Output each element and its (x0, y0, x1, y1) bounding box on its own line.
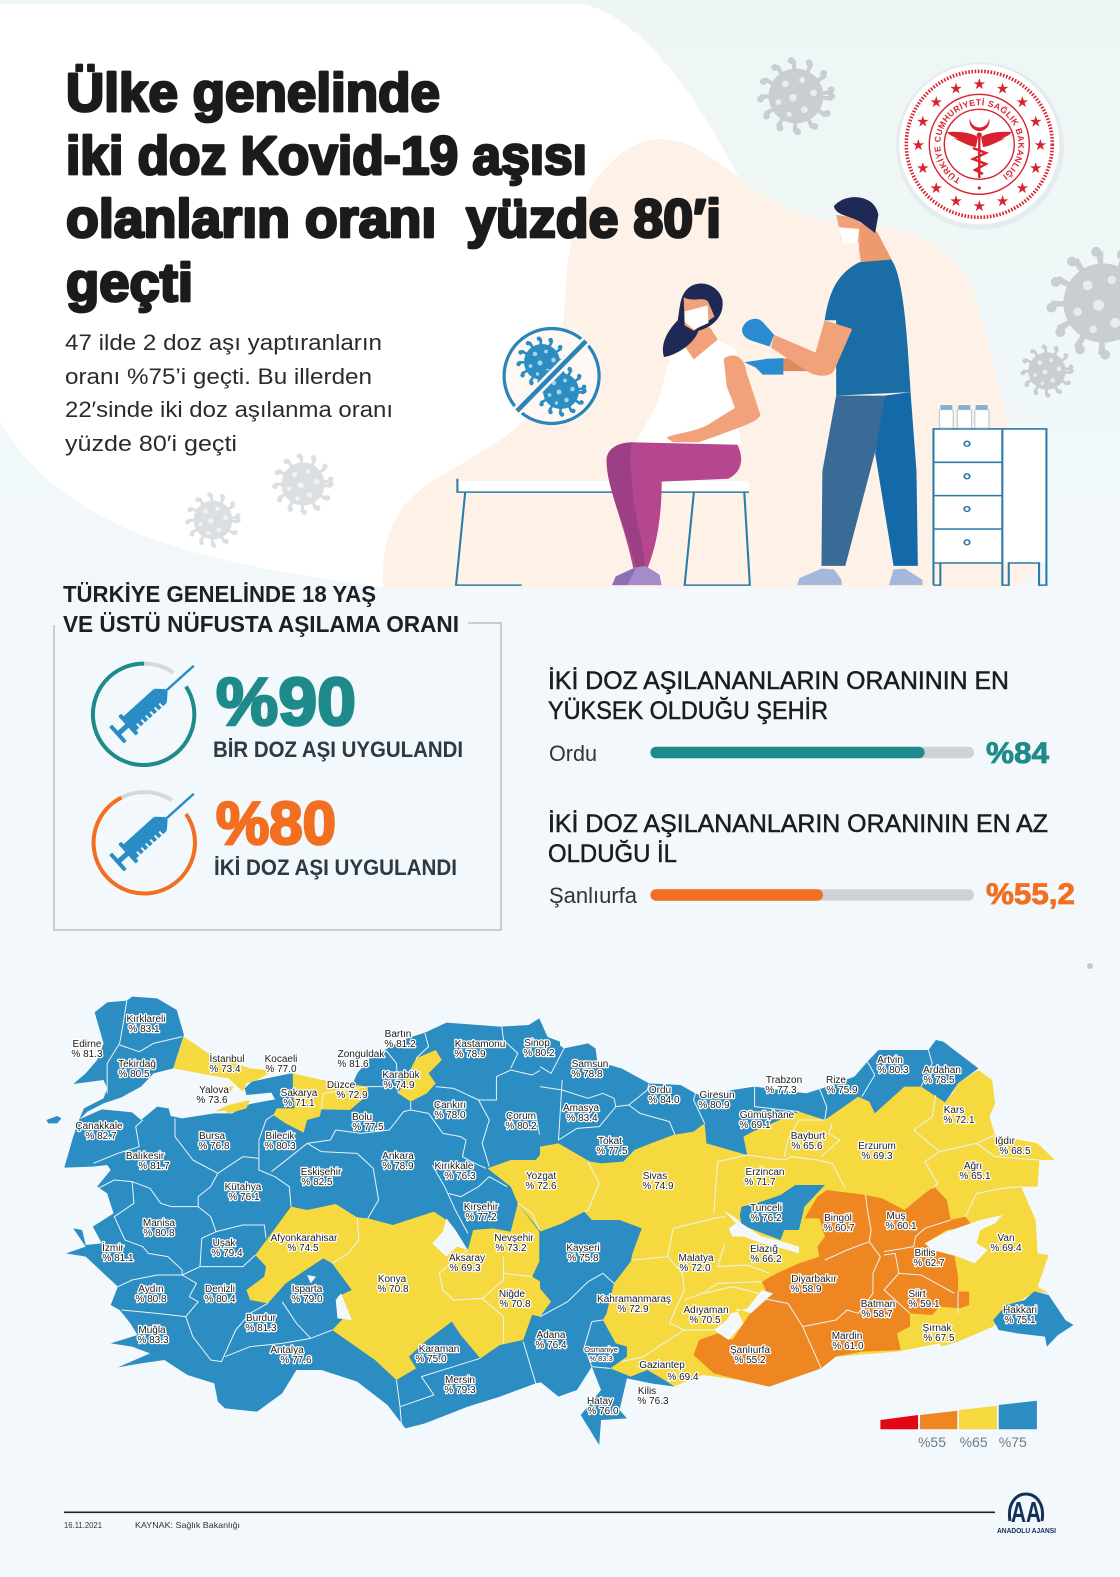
map: province labels: % 58.9 (790, 1284, 822, 1295)
map: province labels: % 73.4 (209, 1064, 241, 1075)
map: province labels: % 80.9 (698, 1100, 730, 1111)
map: province labels: Düzce (327, 1080, 355, 1091)
logo: Anadolu Ajansı: AA (1011, 1497, 1041, 1529)
map: province labels: % 80.3 (264, 1141, 296, 1152)
map: province labels: % 76.2 (750, 1213, 782, 1224)
map: province labels: Niğde (499, 1289, 525, 1300)
legend: %65 (960, 1434, 988, 1450)
map: province labels: % 78.0 (434, 1110, 466, 1121)
map: province labels: Balıkesir (126, 1151, 164, 1162)
map: province labels: Gümüşhane (740, 1110, 794, 1121)
title: Ülke genelinde (66, 63, 440, 123)
map: province labels: % 84.0 (648, 1095, 680, 1106)
map: province labels: İzmir (102, 1243, 124, 1254)
map: province labels: % 69.3 (861, 1151, 893, 1162)
map: province labels: Artvin (877, 1055, 903, 1066)
map: province labels: % 79.0 (291, 1294, 323, 1305)
footer: source line: KAYNAK: Sağlık Bakanlığı (135, 1520, 240, 1530)
map: province labels: Aydın (138, 1284, 164, 1295)
panel: lowest rate city: OLDUĞU İL (548, 839, 677, 868)
map: province labels: % 82.5 (301, 1177, 333, 1188)
map: province labels: Ardahan (923, 1065, 961, 1076)
map: province labels: % 76.4 (535, 1340, 567, 1351)
map: province labels: Ağrı (964, 1161, 982, 1172)
heading: vaccination rate: VE ÜSTÜ NÜFUSTA AŞILAMA ORANI (63, 611, 459, 637)
map: province labels: % 75.1 (1004, 1315, 1036, 1326)
legend: %75 (999, 1434, 1027, 1450)
map: province labels: Mersin (445, 1375, 475, 1386)
subtitle text block (65, 330, 393, 456)
heading: vaccination rate (63, 581, 459, 637)
map: province labels: % 76.0 (587, 1406, 619, 1417)
map: province labels: Elazığ (750, 1244, 778, 1255)
map: province labels: % 82.7 (85, 1131, 117, 1142)
logo: Ministry of Health seal: ★ (1016, 93, 1029, 111)
map: province labels: Kahramanmaraş (597, 1294, 671, 1305)
map: western provinces (46, 997, 560, 1428)
logo: Ministry of Health seal: ★ (1016, 179, 1029, 197)
map: province labels: % 68.5 (999, 1146, 1031, 1157)
title: olanların oranı yüzde 80′i (66, 189, 721, 249)
map: province labels: Aksaray (449, 1253, 485, 1264)
map: province labels: % 75.0 (415, 1354, 447, 1365)
footer: source line (64, 1512, 995, 1530)
map: province labels: % 77.2 (465, 1212, 497, 1223)
subtitle text block: oranı %75’i geçti. Bu illerden (65, 364, 372, 389)
map: province labels: % 81.3 (245, 1323, 277, 1334)
map: province labels: % 79.4 (211, 1248, 243, 1259)
footer: source line: 16.11.2021 (64, 1521, 103, 1530)
map: province labels: % 70.5 (689, 1315, 721, 1326)
map: province labels: Afyonkarahisar (271, 1233, 337, 1244)
map: province labels: % 77.5 (596, 1146, 628, 1157)
illustration: vaccination scene (456, 197, 1046, 585)
background: upper tint (0, 0, 1120, 590)
map: province labels: % 80.3 (877, 1065, 909, 1076)
map: province labels: Adana (537, 1330, 565, 1341)
logo: Ministry of Health seal: ★ (996, 192, 1009, 210)
map: province labels: Kırklareli (127, 1014, 165, 1025)
map: province labels: % 81.6 (337, 1059, 369, 1070)
map: province labels: Tekirdağ (118, 1059, 156, 1070)
background: cream blob (383, 139, 1036, 587)
map: province labels: Çankırı (434, 1100, 466, 1111)
map: province labels: Amasya (563, 1103, 599, 1114)
map: province labels: Karaman (419, 1344, 459, 1355)
map: province labels: Osmaniye (584, 1345, 618, 1354)
map: province labels: Kırıkkale (435, 1161, 473, 1172)
map: province labels: % 70.8 (377, 1284, 409, 1295)
map: province labels: Kütahya (225, 1182, 261, 1193)
map: province labels: Şanlıurfa (730, 1345, 770, 1356)
map: province labels: % 76.1 (228, 1192, 260, 1203)
map: province labels: % 77.5 (352, 1122, 384, 1133)
logo: Ministry of Health seal: ★ (949, 192, 963, 210)
logo: Ministry of Health seal: ★ (912, 136, 925, 154)
subtitle text block: yüzde 80′i geçti (65, 431, 237, 456)
map: province labels: Yozgat (526, 1171, 556, 1182)
map: province labels: % 60.7 (823, 1223, 855, 1234)
map: province labels: Giresun (699, 1090, 735, 1101)
map: province labels: % 76.8 (198, 1141, 230, 1152)
logo: Ministry of Health seal: ★ (996, 80, 1009, 98)
bench (456, 479, 750, 585)
panel: highest rate city: İKİ DOZ AŞILANANLARIN ORANININ EN (548, 666, 1009, 695)
map: province labels: İstanbul (209, 1054, 245, 1065)
map: province labels: Muğla (138, 1325, 166, 1336)
map: province labels: Malatya (678, 1253, 714, 1264)
map: province labels: Denizli (205, 1284, 235, 1295)
map: province labels: Erzurum (858, 1141, 896, 1152)
title (66, 63, 721, 313)
map: province labels: % 71.1 (283, 1098, 315, 1109)
map: province labels: Bayburt (791, 1131, 825, 1142)
map: province labels: % 75.9 (826, 1085, 858, 1096)
map: province labels: % 66.2 (750, 1254, 782, 1265)
map: province labels: % 59.1 (908, 1299, 940, 1310)
icon: no-virus sign (504, 328, 599, 424)
map: province labels: Kayseri (566, 1243, 600, 1254)
map: province labels: % 70.8 (499, 1299, 531, 1310)
map: province labels: Bartın (385, 1029, 411, 1040)
map: province labels (71, 1014, 1037, 1417)
panel: highest rate city (548, 666, 1049, 770)
logo: Ministry of Health seal: ★ (1029, 113, 1042, 131)
map: province labels: % 77.3 (765, 1085, 797, 1096)
background: white blob (0, 4, 745, 587)
map of Turkey (46, 997, 1073, 1445)
heading: vaccination rate: TÜRKİYE GENELİNDE 18 YAŞ (63, 581, 376, 607)
map: province labels: % 83.3 (589, 1354, 613, 1363)
map: province labels: Hakkari (1003, 1305, 1037, 1316)
legend: %55 (918, 1434, 946, 1450)
map: province labels: % 83.1 (128, 1024, 160, 1035)
map: province labels: Nevşehir (494, 1233, 534, 1244)
map: province labels: Antalya (270, 1345, 304, 1356)
map: province labels: % 75.8 (567, 1253, 599, 1264)
map: province labels: % 55.2 (734, 1355, 766, 1366)
map: province labels: Kastamonu (455, 1039, 505, 1050)
panel: lowest rate city: İKİ DOZ AŞILANANLARIN ORANININ EN AZ (548, 809, 1048, 838)
map: province labels: % 78.8 (571, 1069, 603, 1080)
map: province labels: % 80.2 (505, 1121, 537, 1132)
map: province labels: Kilis (638, 1386, 656, 1397)
map: province labels: Kırşehir (464, 1202, 498, 1213)
map: province labels: % 67.5 (923, 1333, 955, 1344)
map: province labels: % 69.4 (990, 1243, 1022, 1254)
map: province labels: Batman (861, 1299, 895, 1310)
map: province labels: Edirne (73, 1039, 101, 1050)
logo: Ministry of Health seal: ★ (949, 80, 963, 98)
map: province labels: Bingöl (824, 1213, 852, 1224)
map: province labels: % 83.4 (566, 1113, 598, 1124)
map: province labels: % 81.7 (138, 1161, 170, 1172)
map: province labels: % 69.1 (739, 1120, 771, 1131)
logo: Anadolu Ajansı: ANADOLU AJANSI (997, 1526, 1056, 1535)
map: province labels: % 81.1 (102, 1253, 134, 1264)
map: province labels: % 72.1 (943, 1115, 975, 1126)
panel: highest rate city: %84 (986, 737, 1049, 770)
map: province labels: Iğdır (995, 1136, 1015, 1147)
map: province labels: % 62.7 (913, 1258, 945, 1269)
stat: one dose: BİR DOZ AŞI UYGULANDI (213, 737, 463, 762)
map: province labels: % 74.9 (642, 1181, 674, 1192)
map: province labels: Adıyaman (683, 1305, 729, 1316)
map: province labels: Kocaeli (265, 1054, 297, 1065)
map: province labels: Karabük (382, 1070, 420, 1081)
map: province labels: Ordu (649, 1085, 671, 1096)
map: province labels: Burdur (246, 1313, 276, 1324)
map: province labels: Tokat (598, 1136, 622, 1147)
map: province labels: Tunceli (750, 1203, 782, 1214)
logo: Ministry of Health seal: ★ (1034, 136, 1047, 154)
icon: virus decorations (188, 60, 1120, 545)
panel: lowest rate city: %55,2 (986, 878, 1075, 911)
woman patient (607, 283, 760, 585)
map: province labels: Mardin (832, 1331, 862, 1342)
cabinet and vials (933, 405, 1046, 585)
man health worker (742, 197, 922, 585)
stat: two doses: İKİ DOZ AŞI UYGULANDI (214, 855, 457, 880)
legend (880, 1401, 1037, 1450)
map: eastern provinces (533, 1020, 1073, 1445)
map: province labels: Siirt (908, 1289, 926, 1300)
map: province labels: % 78.9 (454, 1049, 486, 1060)
map: province labels: % 60.1 (885, 1221, 917, 1232)
map: province labels: % 76.3 (637, 1396, 669, 1407)
map: province labels: Sakarya (281, 1088, 317, 1099)
stat: two doses: %80 (216, 790, 336, 857)
map: province labels: Çanakkale (75, 1121, 123, 1132)
map: province labels: % 79.3 (444, 1385, 476, 1396)
map: province labels: Sinop (524, 1038, 550, 1049)
map: province labels: Gaziantep (639, 1360, 685, 1371)
map: province labels: Çorum (506, 1111, 536, 1122)
map: province labels: Bursa (199, 1131, 225, 1142)
map: province labels: % 77.6 (280, 1355, 312, 1366)
map: province labels: % 77.0 (265, 1064, 297, 1075)
map: province labels: Kars (944, 1105, 964, 1116)
map: province labels: % 81.2 (384, 1039, 416, 1050)
subtitle text block: 22′sinde iki doz aşılanma oranı (65, 397, 393, 422)
title: geçti (66, 253, 193, 313)
panel: highest rate city: Ordu (549, 741, 597, 766)
map: province labels: % 72.9 (336, 1090, 368, 1101)
map: province labels: % 72.6 (525, 1181, 557, 1192)
stat: one dose: %90 (216, 664, 356, 740)
map: province labels: Yalova (199, 1085, 229, 1096)
map: province labels: Diyarbakır (791, 1274, 837, 1285)
map: province labels: % 72.0 (679, 1263, 711, 1274)
map: province labels: % 78.5 (923, 1075, 955, 1086)
map: province labels: Bilecik (266, 1131, 294, 1142)
map: province labels: % 73.2 (495, 1243, 527, 1254)
map: province labels: % 71.7 (744, 1177, 776, 1188)
stat: two doses (94, 784, 457, 893)
map: province labels: Samsun (572, 1059, 608, 1070)
map: province labels: % 65.1 (959, 1171, 991, 1182)
map: province labels: % 80.8 (143, 1228, 175, 1239)
map: province labels: Bolu (352, 1112, 372, 1123)
logo: Ministry of Health seal: ★ (916, 113, 930, 131)
logo: Ministry of Health seal: ★ (929, 179, 943, 197)
title: iki doz Kovid-19 aşısı (66, 126, 587, 186)
map: province labels: Bitlis (914, 1248, 936, 1259)
logo: Ministry of Health seal: ★ (929, 93, 943, 111)
panel: lowest rate city: Şanlıurfa (549, 883, 638, 908)
panel: vaccination rate (54, 623, 501, 930)
map: province labels: % 74.9 (383, 1080, 415, 1091)
logo: Ministry of Health seal: ★ (973, 197, 986, 215)
map: province labels: % 69.4 (667, 1372, 699, 1383)
logo: Ministry of Health seal: ★ (1029, 159, 1042, 177)
map: province labels: Eskişehir (301, 1167, 341, 1178)
map: province labels: Muş (887, 1211, 905, 1222)
map: province labels: Rize (826, 1075, 846, 1086)
map: province labels: Ankara (382, 1151, 414, 1162)
logo: Ministry of Health seal: ★ (973, 75, 986, 93)
map: province labels: % 81.3 (71, 1049, 103, 1060)
map: province labels: % 61.0 (832, 1341, 864, 1352)
logo: Ministry of Health seal: ★ (916, 159, 930, 177)
map: province labels: % 80.4 (204, 1294, 236, 1305)
map: province labels: Şırnak (923, 1323, 951, 1334)
panel: lowest rate city (548, 809, 1075, 911)
map: province labels: Hatay (587, 1396, 613, 1407)
stat: one dose (93, 656, 463, 765)
map: province labels: Konya (378, 1274, 406, 1285)
logo: Ministry of Health seal: TÜRKİYE CUMHURİYETİ SAĞLIK BAKANLIĞI (934, 98, 1024, 184)
map: province labels: Trabzon (766, 1075, 802, 1086)
map: province labels: % 69.3 (449, 1263, 481, 1274)
map: province labels: % 73.6 (196, 1095, 228, 1106)
map: province labels: Uşak (213, 1238, 235, 1249)
map: province labels: % 80.2 (523, 1048, 555, 1059)
map: province labels: Sivas (643, 1171, 667, 1182)
panel: highest rate city: YÜKSEK OLDUĞU ŞEHİR (548, 696, 828, 725)
map: province labels: % 74.5 (287, 1243, 319, 1254)
map: province labels: Erzincan (746, 1167, 784, 1178)
map: province labels: Van (997, 1233, 1015, 1244)
logo: Ministry of Health seal (896, 62, 1064, 230)
map: province labels: % 78.9 (382, 1161, 414, 1172)
map: province labels: % 83.3 (137, 1335, 169, 1346)
map: province labels: % 72.9 (617, 1304, 649, 1315)
map: province labels: % 80.5 (118, 1069, 150, 1080)
map: province labels: Manisa (143, 1218, 175, 1229)
map: province labels: % 80.8 (135, 1294, 167, 1305)
map: province labels: % 58.7 (861, 1309, 893, 1320)
logo: Anadolu Ajansı (997, 1494, 1056, 1535)
map: province labels: Zonguldak (338, 1049, 384, 1060)
map: province labels: Isparta (292, 1284, 322, 1295)
map: province labels: % 76.3 (444, 1171, 476, 1182)
map: province labels: % 65.6 (791, 1141, 823, 1152)
subtitle text block: 47 ilde 2 doz aşı yaptıranların (65, 330, 382, 355)
